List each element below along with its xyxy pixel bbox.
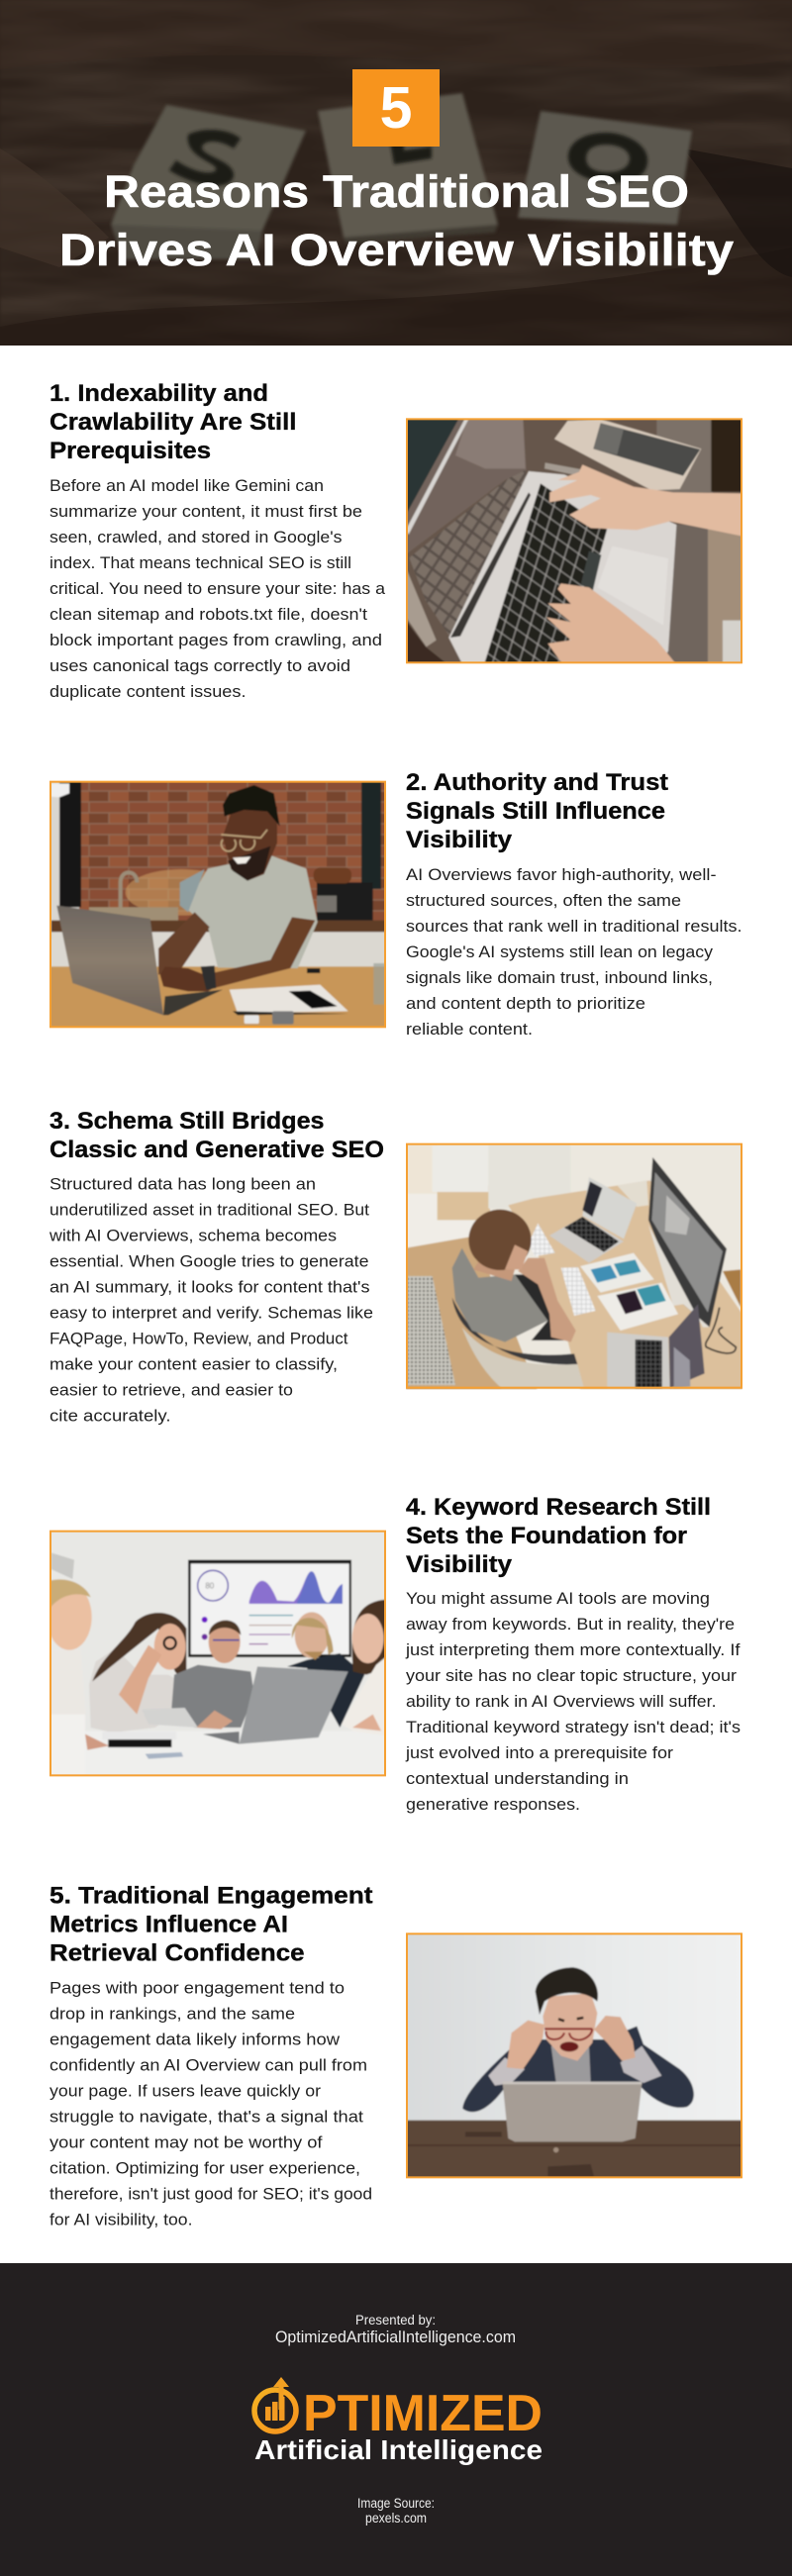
text block 1: block important pages from crawling, and: [50, 632, 382, 649]
heading 2: Signals Still Influence: [406, 798, 665, 825]
photo: man at desk with monitor and laptops: [406, 1142, 742, 1390]
heading 1: Crawlability Are Still: [50, 409, 297, 436]
heading 3: Classic and Generative SEO: [50, 1137, 384, 1163]
image source: pexels.com: [365, 2511, 427, 2526]
text block 5: therefore, isn't just good for SEO; it's good: [50, 2186, 372, 2204]
panel: reason 1: [50, 380, 742, 701]
text block 2: [406, 866, 742, 1039]
photo: team meeting with dashboard: [50, 1531, 386, 1776]
heading 5: Metrics Influence AI: [50, 1911, 288, 1938]
panel: footer: [0, 2263, 792, 2576]
text block 4: away from keywords. But in reality, they're: [406, 1616, 735, 1634]
text block 4: Traditional keyword strategy isn't dead; it's: [406, 1719, 741, 1736]
heading 3: 3. Schema Still Bridges: [50, 1108, 325, 1135]
panel: reason 5: [50, 1883, 742, 2229]
title: Reasons Traditional SEO: [104, 166, 689, 217]
heading 4: Visibility: [406, 1551, 513, 1578]
heading 4: [406, 1494, 711, 1578]
badge: number 5: [352, 69, 440, 147]
text block 3: easier to retrieve, and easier to: [50, 1382, 293, 1400]
text block 4: just evolved into a prerequisite for: [405, 1744, 674, 1762]
heading 3: [50, 1108, 384, 1163]
heading 5: Retrieval Confidence: [50, 1940, 305, 1966]
text block 5: for AI visibility, too.: [50, 2212, 192, 2229]
photo: surprised man lowering glasses at laptop: [406, 1932, 742, 2178]
text block 1: clean sitemap and robots.txt file, doesn't: [50, 606, 367, 624]
text block 2: sources that rank well in traditional results.: [406, 918, 742, 936]
text block 5: citation. Optimizing for user experience,: [50, 2160, 360, 2178]
heading 5: 5. Traditional Engagement: [50, 1883, 372, 1909]
text block 4: generative responses.: [406, 1796, 580, 1814]
heading 5: [50, 1883, 372, 1966]
text block 3: FAQPage, HowTo, Review, and Product: [50, 1331, 348, 1348]
text block 3: make your content easier to classify,: [50, 1356, 338, 1374]
image source: [357, 2496, 435, 2526]
text block 2: AI Overviews favor high-authority, well-: [406, 866, 717, 884]
text block 5: [50, 1980, 372, 2229]
presented by: OptimizedArtificialIntelligence.com: [275, 2328, 516, 2346]
panel: reason 2: [50, 769, 742, 1039]
text block 3: with AI Overviews, schema becomes: [49, 1228, 337, 1245]
text block 5: engagement data likely informs how: [50, 2031, 340, 2049]
text block 1: Before an AI model like Gemini can: [50, 477, 324, 495]
header photo: SEO dice on wood: [0, 0, 792, 346]
text block 4: [405, 1590, 741, 1814]
photo: hands typing on laptop: [406, 418, 742, 663]
title: [59, 166, 734, 275]
text block 2: and content depth to prioritize: [406, 995, 645, 1013]
icon: circle with bars and arrow: [254, 2377, 296, 2431]
text block 4: You might assume AI tools are moving: [406, 1590, 710, 1608]
panel: reason 4: [47, 1494, 741, 1814]
text block 1: [50, 477, 386, 701]
text block 1: critical. You need to ensure your site: has a: [50, 580, 386, 598]
text block 3: [49, 1176, 373, 1426]
text block 1: seen, crawled, and stored in Google's: [50, 529, 343, 546]
heading 4: 4. Keyword Research Still: [406, 1494, 711, 1521]
text block 5: your content may not be worthy of: [50, 2134, 323, 2152]
panel: reason 3: [49, 1108, 742, 1426]
text block 3: easy to interpret and verify. Schemas like: [50, 1305, 373, 1323]
logo: [254, 2377, 543, 2465]
title: Drives AI Overview Visibility: [59, 225, 734, 275]
text block 5: confidently an AI Overview can pull from: [50, 2057, 367, 2075]
photo: smiling man at laptop: [50, 780, 386, 1028]
image source: Image Source:: [357, 2496, 435, 2511]
photo: team meeting with dashboard: 80: [205, 1581, 215, 1590]
text block 1: index. That means technical SEO is still: [50, 554, 351, 572]
text block 3: cite accurately.: [50, 1408, 170, 1426]
text block 2: structured sources, often the same: [406, 892, 681, 910]
presented by: Presented by:: [355, 2313, 436, 2328]
heading 1: [50, 380, 297, 464]
logo: PTIMIZED: [303, 2385, 543, 2442]
text block 3: essential. When Google tries to generate: [50, 1253, 369, 1271]
text block 2: Google's AI systems still lean on legacy: [406, 943, 714, 961]
heading 2: Visibility: [406, 827, 513, 853]
heading 1: Prerequisites: [50, 438, 211, 464]
text block 3: underutilized asset in traditional SEO. But: [50, 1202, 369, 1220]
panel: header: [0, 0, 792, 346]
text block 5: your page. If users leave quickly or: [50, 2083, 322, 2101]
text block 5: struggle to navigate, that's a signal that: [50, 2109, 363, 2127]
text block 4: ability to rank in AI Overviews will suffer.: [406, 1693, 717, 1711]
text block 4: contextual understanding in: [406, 1770, 629, 1788]
text block 3: Structured data has long been an: [50, 1176, 316, 1194]
text block 4: your site has no clear topic structure, your: [406, 1667, 738, 1685]
text block 4: just interpreting them more contextually. If: [405, 1641, 741, 1659]
logo: Artificial Intelligence: [254, 2434, 543, 2465]
text block 2: signals like domain trust, inbound links,: [406, 969, 713, 987]
text block 2: reliable content.: [406, 1021, 533, 1039]
badge: number 5: 5: [380, 75, 412, 141]
heading 4: Sets the Foundation for: [406, 1523, 687, 1549]
text block 1: uses canonical tags correctly to avoid: [50, 657, 350, 675]
text block 1: summarize your content, it must first be: [50, 503, 362, 521]
heading 2: [406, 769, 668, 853]
heading 1: 1. Indexability and: [50, 380, 268, 407]
text block 5: Pages with poor engagement tend to: [50, 1980, 345, 1998]
presented by: [275, 2313, 516, 2346]
heading 2: 2. Authority and Trust: [406, 769, 668, 796]
text block 3: an AI summary, it looks for content that's: [50, 1279, 370, 1297]
text block 1: duplicate content issues.: [50, 683, 246, 701]
text block 5: drop in rankings, and the same: [50, 2006, 295, 2024]
